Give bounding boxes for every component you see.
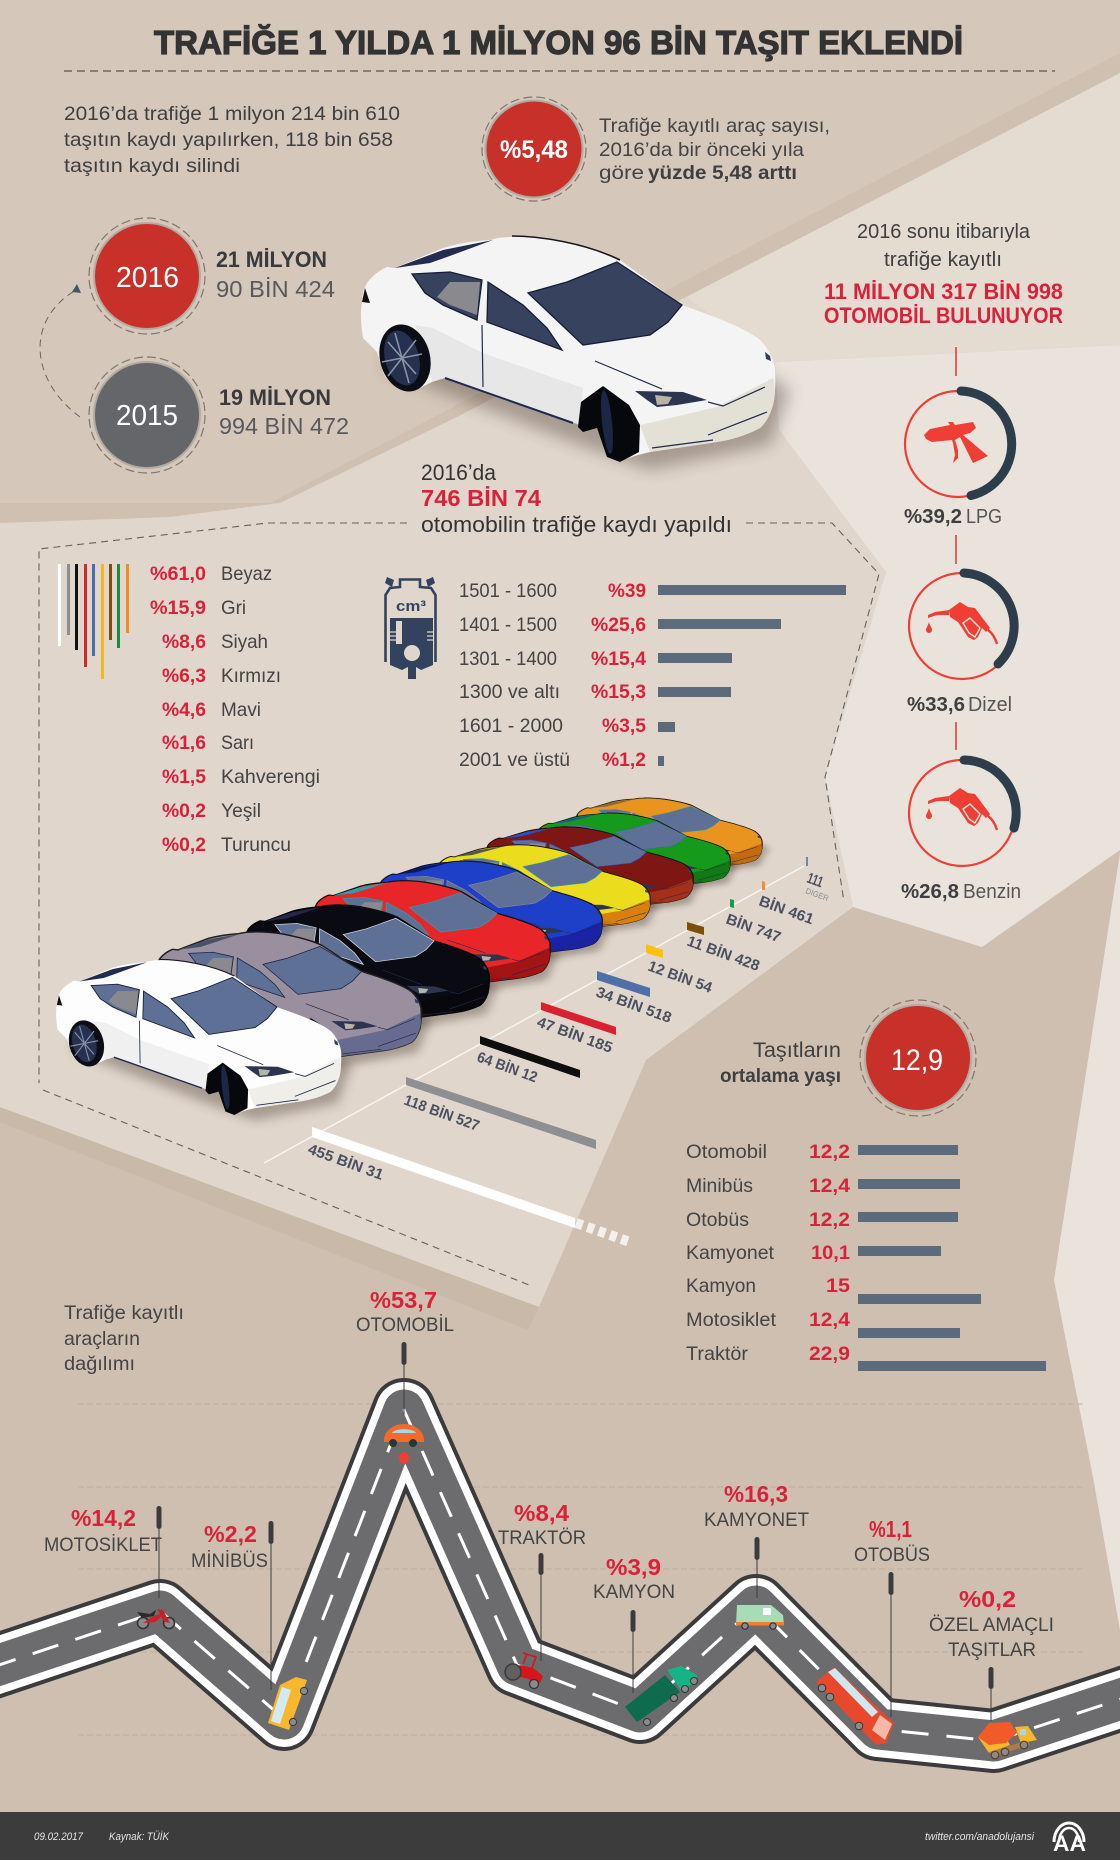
fuel: LPG xyxy=(904,391,1012,528)
car: gray xyxy=(156,931,431,1067)
car: black xyxy=(245,905,498,1027)
fuel: Dizel: Dizel xyxy=(968,694,1012,716)
vehicle shares: %3,9 xyxy=(606,1554,661,1580)
intro text block: taşıtın kaydı silindi xyxy=(64,155,240,177)
average age badge: 12,9 xyxy=(891,1044,943,1077)
text: 2016 fuel total: 11 MİLYON 317 BİN 998 xyxy=(824,279,1063,304)
vehicle shares: KAMYONET xyxy=(704,1509,809,1531)
engine capacity chart: 1501 - 1600 xyxy=(459,580,557,602)
engine capacity chart: 2001 ve üstü xyxy=(459,749,570,771)
fuel: Benzin: Benzin xyxy=(963,881,1021,903)
colour share list: Gri xyxy=(221,597,246,619)
car: orange xyxy=(576,798,769,874)
vehicle shares: OTOMOBİL xyxy=(356,1313,454,1336)
distribution heading: Trafiğe kayıtlı xyxy=(64,1302,184,1324)
vehicle shares: %14,2 xyxy=(71,1505,136,1531)
vehicle: motorcycle xyxy=(137,1609,174,1628)
registrations heading: 746 BİN 74 xyxy=(421,485,541,511)
chart: registrations by colour: 118 BİN 527 xyxy=(402,1092,482,1135)
vehicle age chart: Otomobil xyxy=(686,1141,767,1163)
colour share list: Mavi xyxy=(221,699,261,721)
vehicle shares: %8,4 xyxy=(514,1500,569,1526)
fuel: Benzin: %26,8 xyxy=(901,881,959,903)
vehicle age chart: 10,1 xyxy=(811,1242,850,1264)
chart: registrations by colour: 111 xyxy=(805,870,825,891)
vehicle age chart: Kamyon xyxy=(686,1275,756,1297)
vehicle age chart: Otobüs xyxy=(686,1209,749,1231)
intro text block xyxy=(64,103,400,177)
legend: colour stripes xyxy=(58,564,129,679)
colour share list: Beyaz xyxy=(221,563,272,585)
vehicle age chart: 12,4 xyxy=(809,1309,850,1331)
distribution heading: araçların xyxy=(64,1328,140,1350)
vehicle: car xyxy=(384,1424,424,1464)
vehicle shares: TRAKTÖR xyxy=(498,1527,586,1549)
chart: registrations by colour xyxy=(264,857,830,1242)
fuel: Dizel: %33,6 xyxy=(907,694,965,716)
colour share list: Yeşil xyxy=(221,800,261,822)
engine capacity chart: %15,4 xyxy=(591,648,646,670)
vehicle: tractor xyxy=(505,1653,543,1688)
chart: registrations by colour: BİN 461 xyxy=(757,893,816,928)
vehicle: minibus xyxy=(268,1677,308,1730)
chart: registrations by colour: DİGER xyxy=(804,886,830,903)
footer: twitter.com/anadolujansi xyxy=(925,1831,1035,1843)
title: TRAFİĞE 1 YILDA 1 MİLYON 96 BİN TAŞIT EKLENDİ xyxy=(154,24,963,61)
colour share list: %4,6 xyxy=(162,699,206,721)
registrations heading: 2016’da xyxy=(421,460,497,485)
engine capacity chart: 1300 ve altı xyxy=(459,681,560,703)
vehicle shares: %1,1 xyxy=(869,1516,912,1542)
chart axis line xyxy=(264,866,804,1163)
chart: registrations by colour: BİN 747 xyxy=(724,911,783,946)
engine capacity chart: %3,5 xyxy=(602,715,646,737)
engine capacity chart: %1,2 xyxy=(602,749,646,771)
chart: registrations by colour: 64 BİN 12 xyxy=(475,1049,540,1086)
car: maroon xyxy=(486,827,700,913)
vehicle shares: TAŞITLAR xyxy=(948,1639,1036,1661)
colour share list: Turuncu xyxy=(221,834,291,856)
vehicle age chart: 15 xyxy=(826,1275,850,1297)
chart: registrations by colour: 11 BİN 428 xyxy=(685,933,762,975)
engine capacity chart: %15,3 xyxy=(591,681,646,703)
colour share list: %8,6 xyxy=(162,631,206,653)
growth text block xyxy=(599,115,830,184)
engine capacity chart: 1601 - 2000 xyxy=(459,715,563,737)
vehicle shares: MOTOSİKLET xyxy=(44,1533,162,1556)
car: green xyxy=(537,813,737,892)
road xyxy=(0,1410,1120,1741)
growth text block: göre xyxy=(599,162,644,184)
colour share list: %0,2 xyxy=(162,800,206,822)
growth text block: 2016’da bir önceki yıla xyxy=(599,139,804,161)
fuel chart xyxy=(901,347,1021,903)
engine capacity chart: %25,6 xyxy=(591,614,646,636)
vehicle shares: KAMYON xyxy=(593,1581,675,1603)
average age badge xyxy=(720,1000,976,1116)
fuel: LPG: %39,2 xyxy=(904,506,962,528)
arrow: 2015 to 2016 xyxy=(40,284,81,417)
colour share list: %61,0 xyxy=(150,563,206,585)
colour share list: %1,5 xyxy=(162,766,206,788)
engine capacity chart xyxy=(459,580,846,771)
badge: 2016 total: 21 MİLYON xyxy=(216,247,327,272)
logo: AA: AA xyxy=(1053,1831,1086,1856)
text: 2016 fuel total xyxy=(824,221,1063,328)
vehicle age chart: Minibüs xyxy=(686,1175,753,1197)
badge: 2015 total: 19 MİLYON xyxy=(219,385,331,410)
footer: Kaynak: TÜİK xyxy=(109,1831,170,1843)
chart: registrations by colour: 455 BİN 31 xyxy=(306,1141,386,1184)
vehicle shares: %0,2 xyxy=(959,1586,1016,1612)
vehicle: bus xyxy=(816,1667,894,1745)
vehicle age chart: 12,2 xyxy=(809,1141,850,1163)
colour share list: Siyah xyxy=(221,631,268,653)
text: 2016 fuel total: OTOMOBİL BULUNUYOR xyxy=(824,303,1063,328)
chart: registrations by colour: 12 BİN 54 xyxy=(646,958,715,997)
vehicle age chart: Traktör xyxy=(686,1343,748,1365)
vehicle age chart xyxy=(686,1141,1046,1371)
dashed frame xyxy=(39,523,879,1285)
vehicle shares: %2,2 xyxy=(204,1521,257,1547)
vehicle age chart: Kamyonet xyxy=(686,1242,775,1264)
footer xyxy=(0,1812,1120,1860)
engine capacity chart: %39 xyxy=(608,580,646,602)
text: 2016 fuel total: 2016 sonu itibarıyla xyxy=(857,221,1031,243)
vehicle shares xyxy=(44,1287,1054,1661)
badge: 2015 total xyxy=(89,357,349,473)
chart: registrations by colour: 34 BİN 518 xyxy=(594,984,674,1027)
colour share list: %15,9 xyxy=(150,597,206,619)
road markers xyxy=(156,1342,994,1721)
colour share list: Kırmızı xyxy=(221,665,281,687)
vehicle age chart: Motosiklet xyxy=(686,1309,777,1331)
vehicle shares: %16,3 xyxy=(724,1481,788,1507)
vehicle shares: OTOBÜS xyxy=(854,1544,930,1566)
fuel: LPG: LPG xyxy=(966,506,1002,528)
vehicle: mixer truck xyxy=(978,1722,1037,1759)
growth text block: yüzde 5,48 arttı xyxy=(648,162,797,184)
colour share list: %0,2 xyxy=(162,834,206,856)
icon: engine cm3 xyxy=(385,577,436,679)
registrations heading: otomobilin trafiğe kaydı yapıldı xyxy=(421,512,732,537)
engine capacity chart: 1301 - 1400 xyxy=(459,648,557,670)
colour share list xyxy=(150,563,320,856)
footer: 09.02.2017 xyxy=(34,1831,84,1843)
car: red xyxy=(314,880,559,992)
vehicle age chart: 12,4 xyxy=(809,1175,850,1197)
badge: 2016 total: 90 BİN 424 xyxy=(216,276,335,302)
vehicle: truck xyxy=(625,1666,698,1726)
icon: engine cm3: cm³ xyxy=(396,598,426,615)
car: yellow xyxy=(437,845,658,935)
vehicle age chart: 22,9 xyxy=(809,1343,850,1365)
growth text block: Trafiğe kayıtlı araç sayısı, xyxy=(599,115,830,137)
vehicle age chart: 12,2 xyxy=(809,1209,850,1231)
badge: %5,48 xyxy=(482,97,586,201)
vehicle: van xyxy=(736,1605,784,1629)
car: blue xyxy=(378,861,610,962)
colour share list: %1,6 xyxy=(162,732,206,754)
car: white xyxy=(56,959,351,1120)
main white car xyxy=(361,236,790,470)
fuel: Benzin xyxy=(901,760,1021,903)
badge: 2015 total: 2015 xyxy=(116,400,178,432)
vehicle shares: %53,7 xyxy=(370,1287,437,1313)
average age badge: Taşıtların xyxy=(753,1039,841,1062)
colour share list: Sarı xyxy=(221,732,254,754)
badge: 2015 total: 994 BİN 472 xyxy=(219,413,349,439)
registrations heading xyxy=(421,460,732,537)
intro text block: 2016’da trafiğe 1 milyon 214 bin 610 xyxy=(64,103,400,125)
grid lines xyxy=(78,1404,1085,1735)
colour share list: Kahverengi xyxy=(221,766,320,788)
fuel: Dizel xyxy=(907,573,1015,716)
badge: 2016 total xyxy=(89,218,335,334)
vehicle shares: MİNİBÜS xyxy=(191,1549,268,1572)
badge: 2016 total: 2016 xyxy=(116,262,179,294)
engine capacity chart: 1401 - 1500 xyxy=(459,614,557,636)
intro text block: taşıtın kaydı yapılırken, 118 bin 658 xyxy=(64,129,393,151)
distribution heading: dağılımı xyxy=(64,1353,135,1375)
average age badge: ortalama yaşı xyxy=(720,1066,841,1087)
colour share list: %6,3 xyxy=(162,665,206,687)
distribution heading xyxy=(64,1302,184,1375)
text: 2016 fuel total: trafiğe kayıtlı xyxy=(884,249,1002,271)
chart: registrations by colour: 47 BİN 185 xyxy=(535,1014,615,1057)
badge: %5,48: %5,48 xyxy=(500,136,568,164)
vehicle shares: ÖZEL AMAÇLI xyxy=(929,1614,1054,1636)
